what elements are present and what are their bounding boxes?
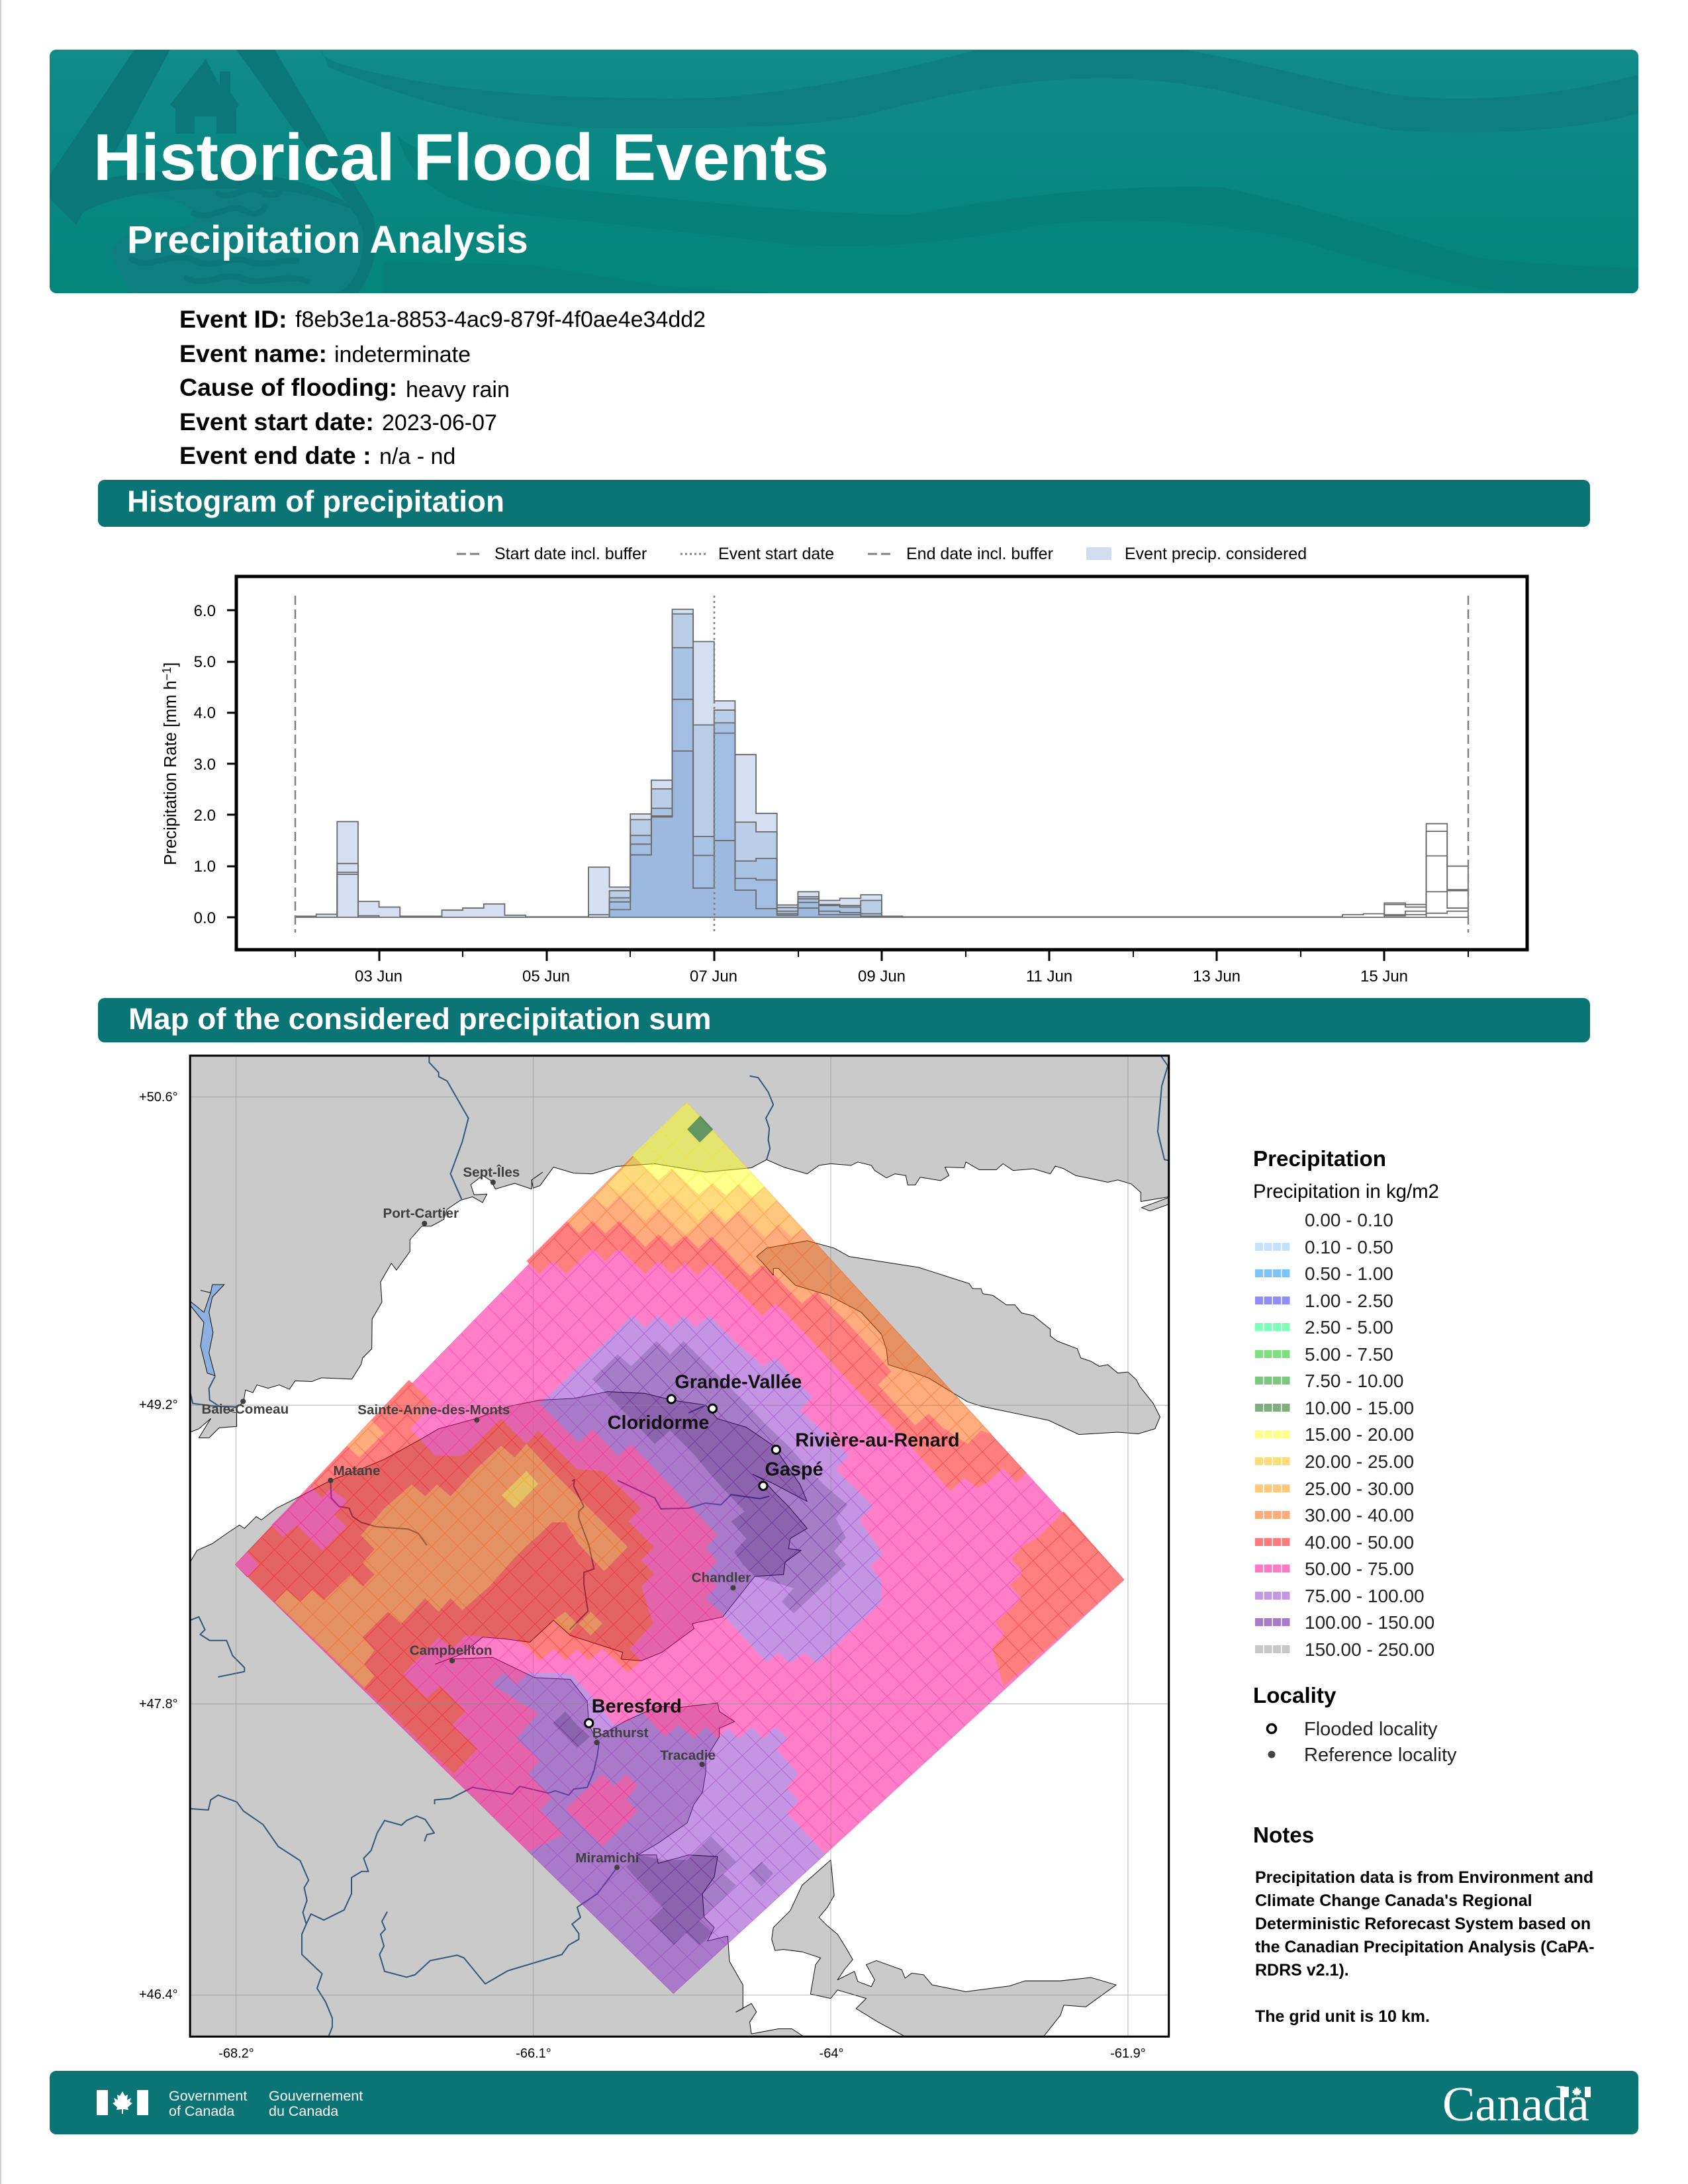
- event metadata block: indeterminate: [334, 342, 471, 367]
- event metadata block: 2023-06-07: [382, 410, 497, 435]
- map axis labels: +46.4°: [139, 1987, 178, 2002]
- event metadata block: heavy rain: [406, 377, 510, 402]
- reference localities: Campbellton: [410, 1643, 492, 1659]
- y axis: 5.0: [194, 653, 216, 671]
- event metadata block: Event end date :: [179, 441, 371, 469]
- reference localities: Sainte-Anne-des-Monts: [357, 1402, 510, 1418]
- precipitation grid lines: [235, 1103, 1124, 1993]
- notes: Notes: [1253, 1823, 1314, 1848]
- event metadata block: n/a - nd: [379, 444, 455, 469]
- event metadata block: Event start date:: [179, 408, 374, 435]
- precipitation map: [189, 1055, 1170, 2038]
- x axis: 11 Jun: [1026, 968, 1072, 985]
- land masses: [190, 1056, 1169, 2036]
- map frame: [190, 1056, 1169, 2036]
- histogram legend: Event precip. considered: [1125, 545, 1307, 563]
- precipitation legend: Precipitation: [1253, 1147, 1386, 1171]
- reference localities: Sept-Îles: [463, 1164, 520, 1180]
- legend labels: 15.00 - 20.00: [1305, 1424, 1414, 1445]
- flooded localities: Rivière-au-Renard: [795, 1430, 960, 1451]
- legend labels: 50.00 - 75.00: [1305, 1559, 1414, 1579]
- x axis: 09 Jun: [858, 968, 906, 985]
- y axis title: ]: [162, 662, 180, 667]
- legend labels: 2.50 - 5.00: [1305, 1317, 1393, 1338]
- y axis: 4.0: [194, 704, 216, 722]
- notes: the Canadian Precipitation Analysis (CaPA-: [1255, 1938, 1595, 1956]
- locality legend: Reference locality: [1304, 1745, 1457, 1766]
- y axis title: −1: [160, 667, 173, 680]
- y axis: 6.0: [194, 602, 216, 620]
- reference localities: Chandler: [692, 1570, 751, 1586]
- event metadata block: Cause of flooding:: [179, 373, 397, 401]
- reference localities: Baie-Comeau: [201, 1402, 289, 1417]
- flooded localities: Beresford: [592, 1696, 682, 1717]
- locality legend: Flooded locality: [1304, 1719, 1438, 1740]
- y axis: 0.0: [194, 909, 216, 927]
- government wordmark: Government: [169, 2088, 247, 2104]
- legend labels: 25.00 - 30.00: [1305, 1479, 1414, 1499]
- histogram chart: [160, 576, 1527, 985]
- rivers: [190, 1056, 1168, 2036]
- precipitation legend: [1253, 1147, 1439, 1660]
- x axis: 15 Jun: [1360, 968, 1408, 985]
- footer banner: [50, 2071, 1638, 2134]
- map axis labels: +50.6°: [139, 1090, 178, 1105]
- legend labels: 10.00 - 15.00: [1305, 1398, 1414, 1418]
- map axis labels: -64°: [820, 2046, 843, 2061]
- flooded localities: Grande-Vallée: [675, 1372, 802, 1393]
- section bar: map: Map of the considered precipitation sum: [128, 1002, 711, 1036]
- precipitation legend: Precipitation in kg/m2: [1253, 1181, 1439, 1203]
- government wordmark: of Canada: [169, 2103, 234, 2119]
- graticule: [190, 1056, 1169, 2036]
- section bar: histogram: [98, 480, 1590, 527]
- reference localities: Miramichi: [575, 1850, 639, 1866]
- event metadata block: Event name:: [179, 340, 327, 367]
- legend labels: 40.00 - 50.00: [1305, 1532, 1414, 1553]
- notes: RDRS v2.1).: [1255, 1961, 1349, 1979]
- title: Historical Flood Events: [93, 120, 829, 195]
- flooded localities: Cloridorme: [608, 1412, 709, 1433]
- map axis labels: +47.8°: [139, 1697, 178, 1711]
- notes: Deterministic Reforecast System based on: [1255, 1915, 1591, 1933]
- x axis: 07 Jun: [690, 968, 737, 985]
- section bar: map: [98, 998, 1590, 1042]
- y axis title: Precipitation Rate [mm h: [162, 680, 180, 865]
- precipitation grid fill: [235, 1103, 1124, 1993]
- map axis labels: -68.2°: [218, 2046, 254, 2061]
- icon: flood warning triangle with house: [50, 50, 376, 293]
- locality legend: Locality: [1253, 1684, 1336, 1708]
- y axis: 1.0: [194, 858, 216, 876]
- event metadata block: Event ID:: [179, 305, 287, 333]
- map axis labels: -66.1°: [516, 2046, 551, 2061]
- histogram legend: End date incl. buffer: [906, 545, 1053, 563]
- histogram legend: [457, 545, 1307, 563]
- legend labels: 100.00 - 150.00: [1305, 1612, 1434, 1633]
- Canada wordmark: Canada: [1442, 2077, 1589, 2132]
- legend labels: 150.00 - 250.00: [1305, 1639, 1434, 1660]
- notes: Precipitation data is from Environment and: [1255, 1868, 1593, 1887]
- y axis: 2.0: [194, 807, 216, 825]
- notes: The grid unit is 10 km.: [1255, 2007, 1430, 2026]
- event metadata block: f8eb3e1a-8853-4ac9-879f-4f0ae4e34dd2: [295, 307, 706, 332]
- legend swatches: [1255, 1243, 1289, 1653]
- x axis: 13 Jun: [1193, 968, 1241, 985]
- chart frame: [236, 576, 1527, 950]
- legend labels: 5.00 - 7.50: [1305, 1344, 1393, 1365]
- histogram legend: Start date incl. buffer: [494, 545, 647, 563]
- legend labels: 0.50 - 1.00: [1305, 1263, 1393, 1284]
- precipitation bars: [295, 610, 1468, 917]
- government wordmark: [169, 2088, 363, 2119]
- reference localities: [201, 1164, 751, 1870]
- reference localities: Bathurst: [592, 1725, 649, 1741]
- subtitle: Precipitation Analysis: [127, 218, 528, 261]
- reference localities: Tracadie: [660, 1748, 716, 1763]
- x axis: 03 Jun: [355, 968, 402, 985]
- header banner: [50, 50, 1638, 293]
- histogram legend: Event start date: [718, 545, 834, 563]
- legend labels: 75.00 - 100.00: [1305, 1586, 1425, 1606]
- section bar: histogram: Histogram of precipitation: [127, 484, 504, 518]
- legend labels: [1305, 1210, 1434, 1660]
- event metadata block: [179, 305, 706, 469]
- legend labels: 1.00 - 2.50: [1305, 1291, 1393, 1311]
- lake: [191, 1285, 224, 1376]
- y axis: [194, 602, 236, 927]
- reference localities: Matane: [333, 1463, 380, 1479]
- legend labels: 0.00 - 0.10: [1305, 1210, 1393, 1230]
- y axis: 3.0: [194, 756, 216, 774]
- notes: Climate Change Canada's Regional: [1255, 1891, 1532, 1910]
- map axis labels: +49.2°: [139, 1398, 178, 1412]
- locality legend: [1253, 1684, 1457, 1766]
- reference localities: Port-Cartier: [383, 1206, 459, 1221]
- legend labels: 20.00 - 25.00: [1305, 1451, 1414, 1472]
- icon: Government of Canada flag: [97, 2090, 148, 2115]
- legend labels: 7.50 - 10.00: [1305, 1371, 1403, 1391]
- government wordmark: du Canada: [269, 2103, 338, 2119]
- x axis: [295, 950, 1468, 985]
- flooded localities: Gaspé: [765, 1459, 823, 1480]
- x axis: 05 Jun: [522, 968, 570, 985]
- notes: [1253, 1823, 1595, 2026]
- legend labels: 30.00 - 40.00: [1305, 1505, 1414, 1525]
- date reference lines: [295, 596, 1468, 933]
- legend labels: 0.10 - 0.50: [1305, 1237, 1393, 1257]
- map axis labels: -61.9°: [1110, 2046, 1146, 2061]
- map axis labels: [139, 1090, 1146, 2061]
- government wordmark: Gouvernement: [269, 2088, 363, 2104]
- flooded localities: [585, 1372, 960, 1727]
